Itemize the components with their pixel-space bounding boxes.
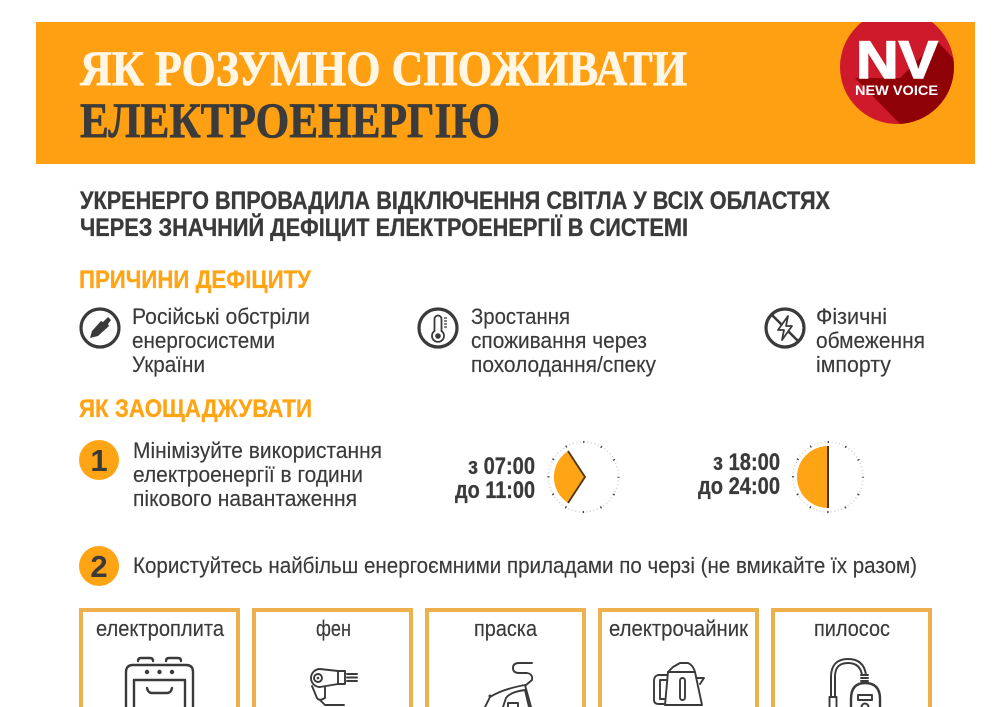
time label: evening peak <box>698 449 780 500</box>
step 1 text: електроенергії в години <box>133 462 363 487</box>
title: ЯК РОЗУМНО СПОЖИВАТИ <box>80 40 687 96</box>
cause text: shelling: енергосистеми <box>132 328 275 353</box>
time label: evening peak: з 18:00 <box>713 449 780 476</box>
logo: NV New Voice: NV <box>856 31 938 90</box>
panel: vacuum cleaner: пилосос <box>814 616 890 641</box>
number badge 2: 2 <box>90 549 108 584</box>
heading: how to save: ЯК ЗАОЩАДЖУВАТИ <box>79 395 312 423</box>
cause text: import limits: обмеження <box>816 328 925 353</box>
subheading: ЧЕРЕЗ ЗНАЧНИЙ ДЕФІЦИТ ЕЛЕКТРОЕНЕРГІЇ В СИСТЕМІ <box>80 212 688 242</box>
panel: vacuum cleaner <box>773 610 930 707</box>
cause text: consumption growth: Зростання <box>471 304 570 329</box>
cause text: shelling: Російські обстріли <box>132 304 310 329</box>
icon: crossed-out lightning <box>766 309 804 347</box>
cause text: import limits: імпорту <box>816 352 891 377</box>
number badge 2 <box>79 546 119 586</box>
cause text: shelling: України <box>132 352 205 377</box>
title: ЕЛЕКТРОЕНЕРГІЮ <box>80 92 500 148</box>
time label: evening peak: до 24:00 <box>698 473 780 500</box>
title <box>80 40 687 148</box>
step 1 <box>79 438 863 512</box>
icon: iron <box>485 663 532 707</box>
time label: morning peak <box>455 453 535 504</box>
icon: missile <box>81 309 119 347</box>
number badge 1 <box>79 440 119 480</box>
heading: causes: ПРИЧИНИ ДЕФІЦИТУ <box>79 266 311 294</box>
panel: electric kettle <box>600 610 757 707</box>
number badge 1: 1 <box>90 443 108 478</box>
clock: 07 to 11 <box>548 442 618 512</box>
step 1 text: Мінімізуйте використання <box>133 438 382 463</box>
cause text: consumption growth <box>471 304 656 377</box>
panel: hair dryer <box>254 610 411 707</box>
panel: electric stove: електроплита <box>96 616 225 641</box>
subheading <box>80 187 830 242</box>
panel: iron <box>427 610 584 707</box>
panel: electric stove <box>81 610 238 707</box>
panel: electric kettle: електрочайник <box>609 616 748 641</box>
panel: causes <box>81 304 925 377</box>
icon: stove <box>126 658 193 707</box>
clock: 18 to 24 <box>793 442 863 512</box>
icon: thermometer <box>419 309 457 347</box>
cause text: import limits: Фізичні <box>816 304 887 329</box>
logo: NV New Voice: NEW VOICE <box>855 82 938 98</box>
panel: hair dryer: фен <box>316 616 351 641</box>
icon: vacuum <box>830 661 880 707</box>
time label: morning peak: до 11:00 <box>455 477 535 504</box>
cause text: consumption growth: споживання через <box>471 328 647 353</box>
icon: hair dryer <box>311 669 357 705</box>
cause text: import limits <box>816 304 925 377</box>
icon: kettle <box>654 663 704 705</box>
cause text: shelling <box>132 304 310 377</box>
time label: morning peak: з 07:00 <box>468 453 535 480</box>
step 1 text <box>133 438 382 511</box>
panel: iron: праска <box>474 616 538 641</box>
step 2 text: Користуйтесь найбільш енергоємними приладами по черзі (не вмикайте їх разом) <box>133 553 917 578</box>
cause text: consumption growth: похолодання/спеку <box>471 352 656 377</box>
subheading: УКРЕНЕРГО ВПРОВАДИЛА ВІДКЛЮЧЕННЯ СВІТЛА У ВСІХ ОБЛАСТЯХ <box>80 187 830 215</box>
logo: NV New Voice <box>840 22 954 124</box>
step 2 <box>79 546 917 586</box>
step 1 text: пікового навантаження <box>133 486 357 511</box>
header banner <box>36 10 975 164</box>
